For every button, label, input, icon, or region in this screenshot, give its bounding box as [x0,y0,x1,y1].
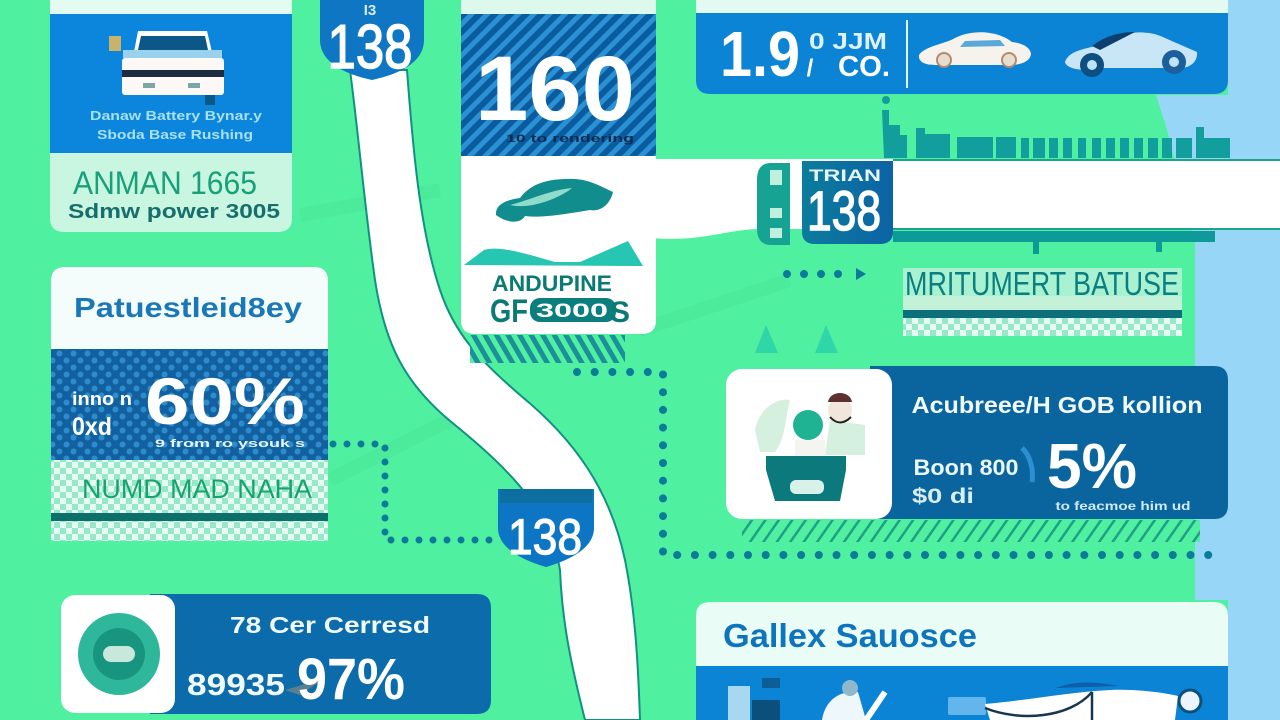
panel: percentage left [51,267,328,541]
bar strip top [882,96,1230,158]
icon: blue car [1065,32,1197,77]
panel: top right cars [696,0,1228,94]
panel: 160: S [610,296,630,329]
panel: top left: Sdmw power 3005 [68,201,280,223]
panel: percentage left: NUMD MAD NAHA [82,474,312,504]
panel: top right cars: / [807,55,814,82]
icon: teal circle [78,613,160,695]
panel: percentage left: 9 from ro ysouk s [155,438,305,450]
markers: teal triangles [755,325,838,353]
route shield 138 center: 138 [508,509,582,565]
panel: 5%: $0 di [912,485,974,508]
dotted connector [333,268,1215,555]
icon: teal car [464,179,643,266]
panel: 160: 3000 [536,301,608,322]
panel: top left: Sboda Base Rushing [97,127,253,142]
panel: 78 car: 89935 [187,667,285,702]
panel: 5%: to feacmoe him ud [1056,499,1190,513]
bar strip lower [893,231,1215,254]
panel: gallex sauosce: Gallex Sauosce [723,617,977,654]
panel: 160: 10 to rendering [506,133,634,145]
panel: 5%: Boon 800 [914,455,1018,480]
panel: percentage left: Patuestleid8ey [74,292,302,323]
route shield 138 right: 138 [807,179,881,242]
label: Mritument Batuse [903,265,1182,336]
icon: white car [919,32,1031,67]
panel: gallex sauosce [696,602,1228,720]
panel: top right cars: 1.9 [720,18,800,90]
panel: 160: ANDUPINE [492,271,612,296]
panel: 5%: Acubreee/H GOB kollion [912,392,1202,418]
panel: 5%: 5% [1047,430,1137,502]
panel: 78 car: 97% [297,647,405,712]
panel text: Danaw Battery Bynar.y [90,108,263,123]
panel: percentage left: 60% [145,364,305,438]
route shield 138 top: I3 [364,2,376,19]
icon: tools [728,678,885,720]
panel: percentage left: inno n [72,389,132,409]
panel: percentage left: 0xd [72,413,112,441]
panel: 78 car [61,594,491,714]
panel: 160: GF [490,293,528,329]
stat text: ANMAN 1665 [73,165,257,201]
panel: 5% [726,366,1228,519]
road [350,70,1280,720]
icon: people at desk [755,393,865,501]
panel: top right cars: CO. [838,51,890,83]
route shield 138 right [757,161,893,245]
panel: top left [50,0,292,232]
icon: white car front [109,31,224,105]
label: Mritument Batuse: MRITUMERT BATUSE [905,265,1179,302]
route shield 138 top: 138 [328,13,412,82]
panel: 160 [461,0,656,334]
route shield 138 right: TRIAN [809,166,881,185]
route shield 138 center [498,489,594,567]
panel: 78 car: 78 Cer Cerresd [230,612,430,638]
icon: white car outline [948,682,1201,720]
panel: 160: 160 [475,38,635,140]
panel: top right cars: 0 JJM [809,28,887,54]
